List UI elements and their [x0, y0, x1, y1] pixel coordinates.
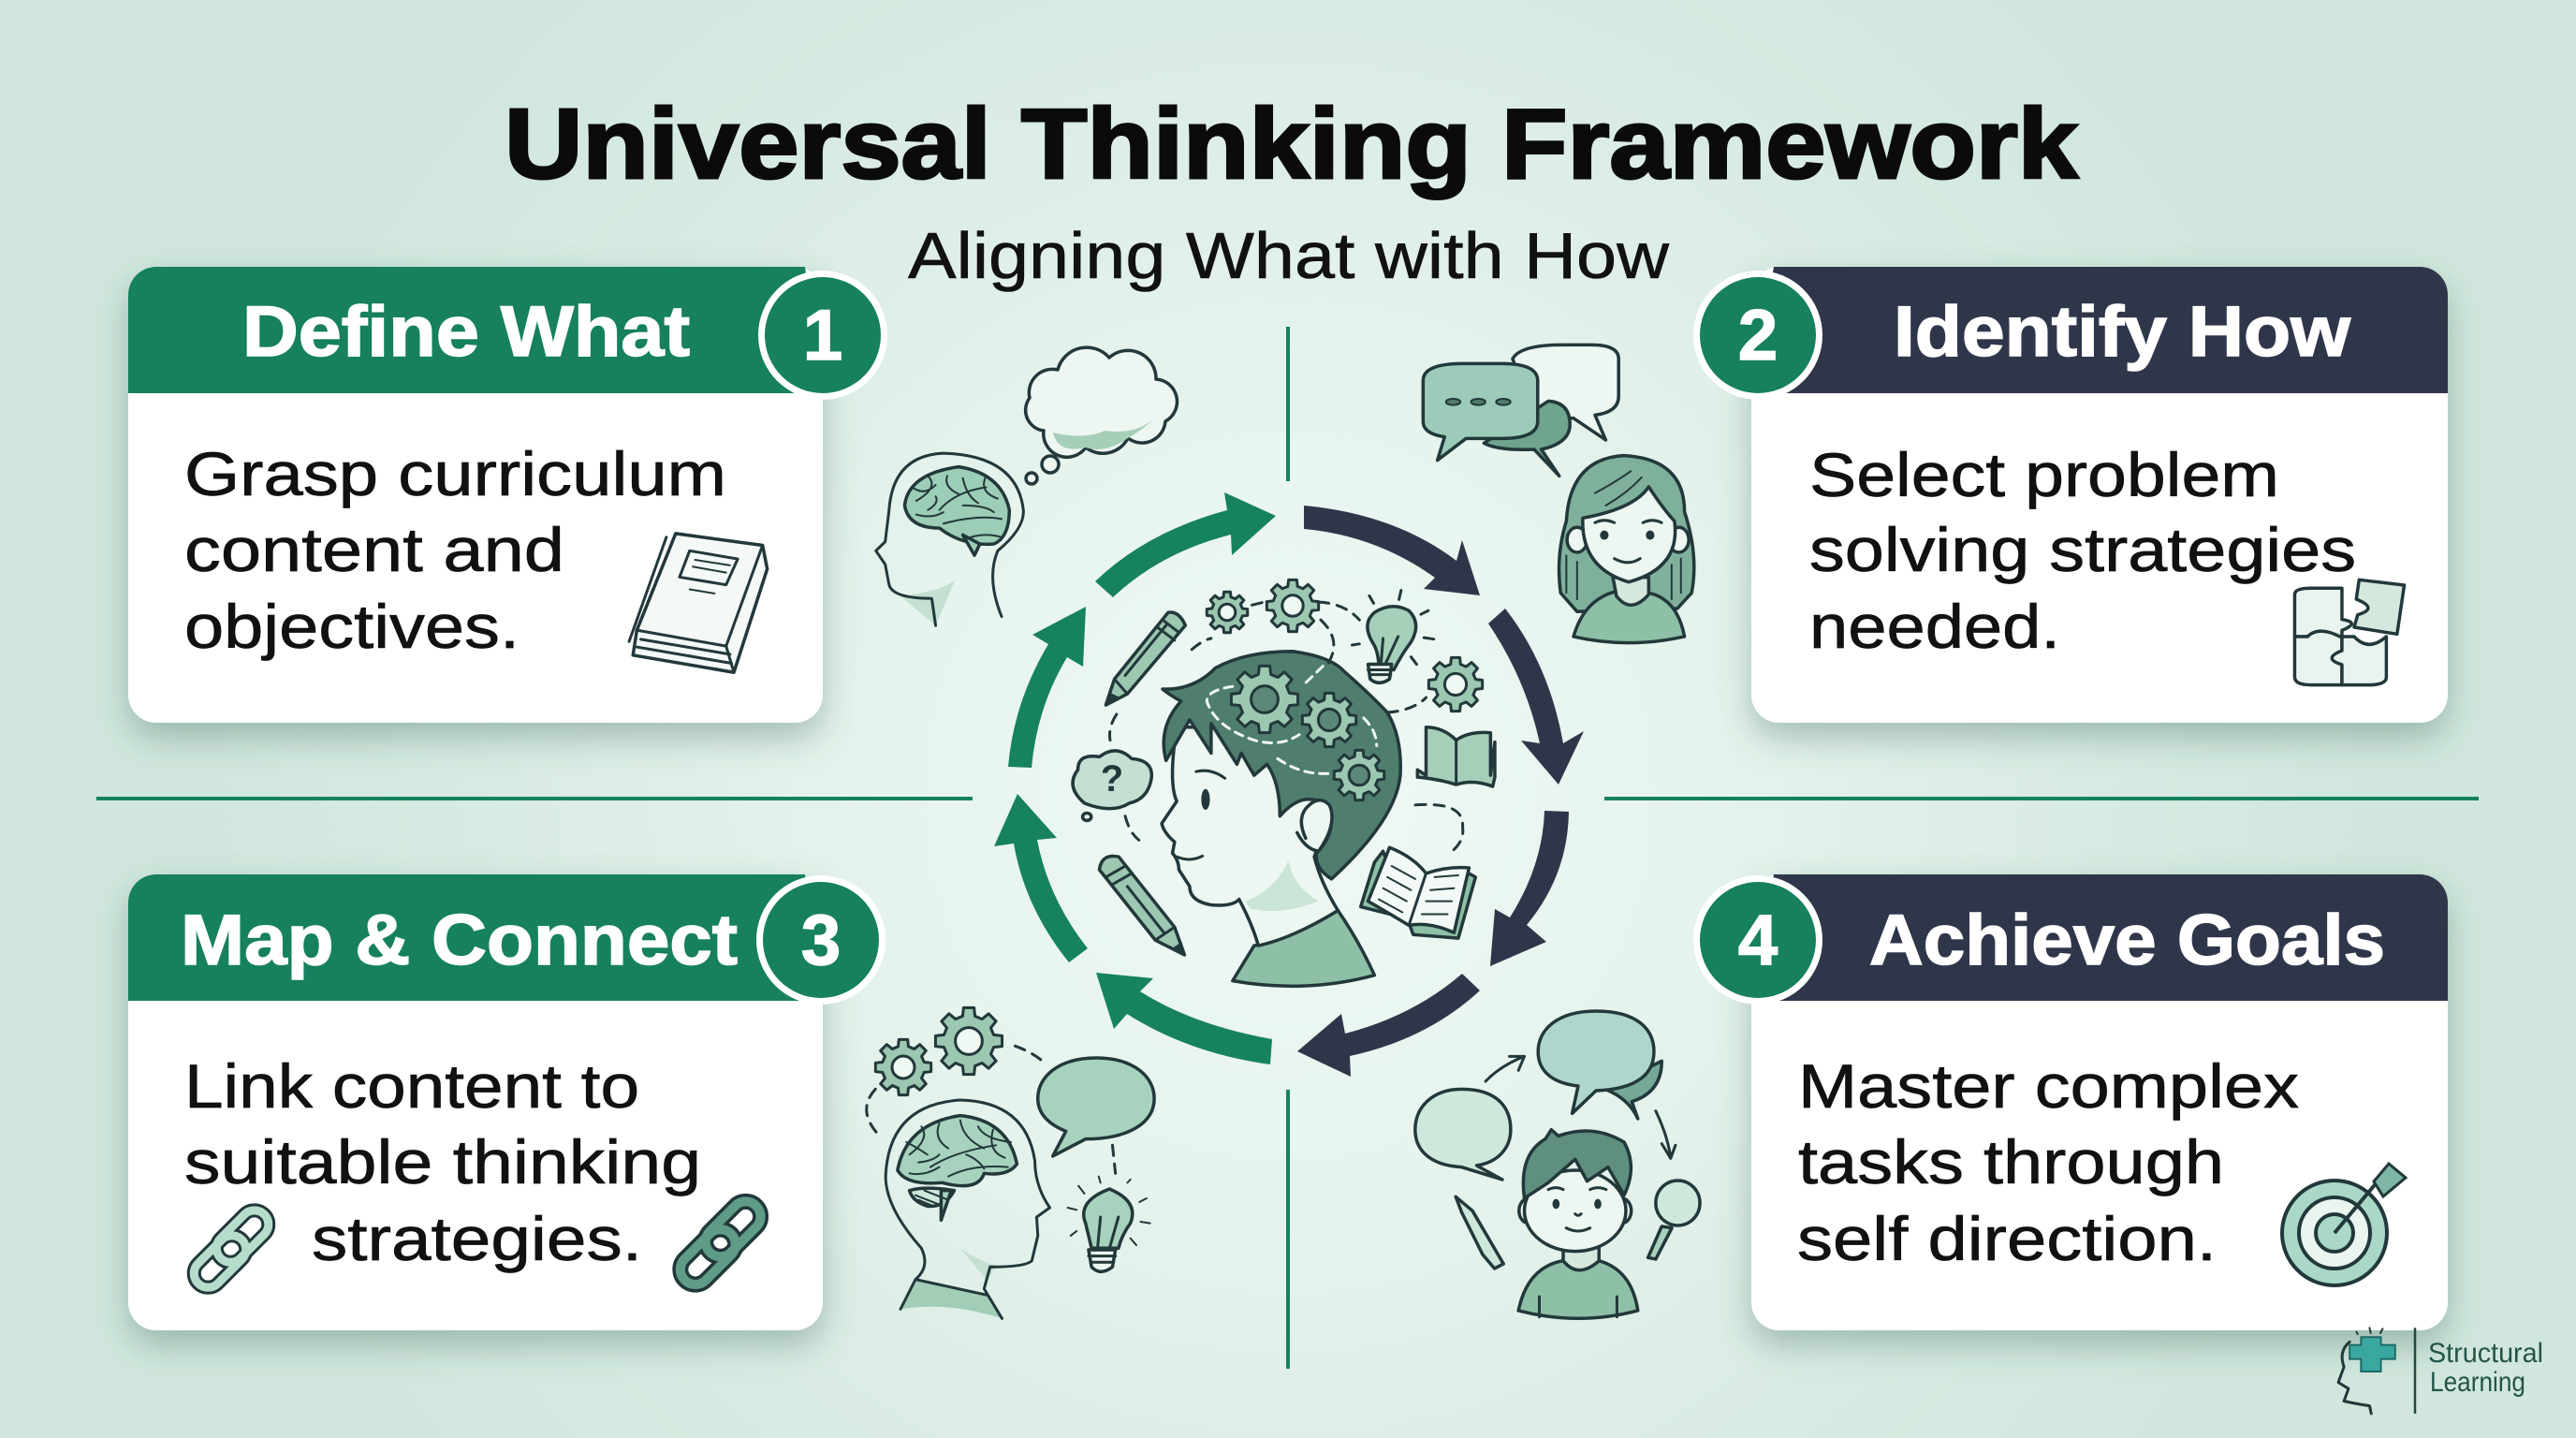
number badge 2: 2 — [1738, 296, 1778, 375]
illustration: girl with speech bubbles — [1423, 345, 1694, 643]
heading: Map & Connect — [181, 901, 738, 980]
number badge 1 — [758, 271, 887, 400]
icon: open book — [1361, 847, 1475, 938]
number badge 1: 1 — [803, 296, 842, 375]
number badge 4: 4 — [1738, 901, 1778, 980]
body text — [1809, 440, 2356, 661]
boy figure — [1518, 1130, 1638, 1318]
body text: tasks through — [1798, 1127, 2224, 1196]
arrow: bottom right — [1297, 974, 1480, 1077]
icon: magnifying glass — [1648, 1181, 1700, 1259]
body text: objectives. — [184, 592, 520, 661]
icon: puzzle — [2294, 580, 2405, 685]
panel: identify how — [1693, 267, 2448, 723]
speech bubbles — [1423, 345, 1618, 476]
body text: Select problem — [1809, 440, 2279, 509]
number badge 3: 3 — [801, 901, 841, 980]
quadrant dividers — [96, 327, 2479, 1369]
icon: target — [2282, 1164, 2406, 1285]
panel: achieve goals — [1693, 874, 2448, 1330]
body text: solving strategies — [1809, 515, 2356, 584]
icon: pencil lower — [1099, 856, 1184, 955]
icon: chain link right — [673, 1196, 768, 1291]
icon: bulb — [1068, 1177, 1150, 1271]
body text: needed. — [1809, 592, 2060, 661]
heading: Define What — [242, 292, 690, 372]
body text: self direction. — [1797, 1204, 2217, 1273]
body text — [184, 1051, 701, 1273]
speech bubbles — [1415, 1011, 1661, 1180]
body text — [1797, 1051, 2299, 1273]
thought cloud — [1026, 347, 1177, 484]
header bar — [128, 267, 823, 393]
illustration: head with thought cloud — [876, 347, 1177, 625]
icon: book — [629, 534, 768, 672]
number badge 2 — [1693, 271, 1822, 400]
panel: define what — [128, 267, 887, 723]
logo: structural learning — [2338, 1328, 2543, 1414]
logo wordmark: Learning — [2430, 1367, 2525, 1398]
illustration: head with brain, gears, speech bubble and bulb — [867, 1007, 1154, 1318]
head and brain — [886, 1100, 1049, 1318]
arrow: bottom left — [1096, 973, 1272, 1064]
logo wordmark: Structural — [2428, 1338, 2543, 1369]
icon: pencil upper — [1105, 612, 1185, 705]
title: Universal Thinking Framework — [505, 89, 2079, 199]
icon: pencil — [1456, 1196, 1503, 1269]
gears inside hair — [1231, 666, 1384, 800]
heading: Identify How — [1894, 292, 2351, 372]
body text: suitable thinking — [184, 1127, 701, 1196]
cycle arrows — [994, 492, 1584, 1077]
body text — [184, 439, 726, 661]
logo wordmark — [2428, 1338, 2543, 1398]
number badge 3 — [756, 875, 886, 1005]
arrow: top right — [1304, 506, 1480, 595]
girl figure — [1559, 456, 1694, 643]
gears above head — [1207, 580, 1483, 712]
head and brain — [876, 453, 1023, 625]
logo head and cross — [2338, 1328, 2415, 1414]
curved arrows — [1486, 1056, 1676, 1158]
heading: Achieve Goals — [1869, 901, 2385, 980]
connector dashes — [867, 1046, 1116, 1173]
icon: chain link left — [187, 1205, 275, 1293]
panel: map and connect — [128, 874, 886, 1330]
arrow: left upper — [1008, 607, 1086, 768]
header bar — [1751, 267, 2448, 393]
header bar — [1751, 874, 2448, 1001]
icon: question thought bubble — [1073, 751, 1151, 820]
illustration: boy with speech bubbles and tools — [1415, 1011, 1700, 1318]
icon: light bulb — [1353, 590, 1434, 682]
arrow: right upper — [1488, 609, 1584, 785]
header bar — [128, 874, 823, 1001]
body text: Grasp curriculum — [184, 439, 726, 508]
body text: Master complex — [1798, 1051, 2299, 1121]
body text: Link content to — [184, 1051, 639, 1121]
subtitle: Aligning What with How — [908, 219, 1669, 292]
student head and shoulders — [1162, 652, 1400, 986]
connector dashes — [1110, 601, 1463, 853]
arrow: right lower — [1490, 811, 1569, 966]
body text: content and — [184, 515, 564, 584]
surrounding icons — [1073, 590, 1495, 955]
icon: green book — [1417, 727, 1495, 786]
arrow: left lower — [994, 794, 1088, 962]
question mark: ? — [1101, 758, 1123, 800]
arrow: step 1 to 2 — [1095, 492, 1276, 597]
speech bubble — [1038, 1058, 1154, 1156]
number badge 4 — [1693, 875, 1822, 1005]
gears — [875, 1007, 1003, 1095]
central illustration: student thinking — [1073, 580, 1495, 986]
body text: strategies. — [312, 1204, 642, 1273]
